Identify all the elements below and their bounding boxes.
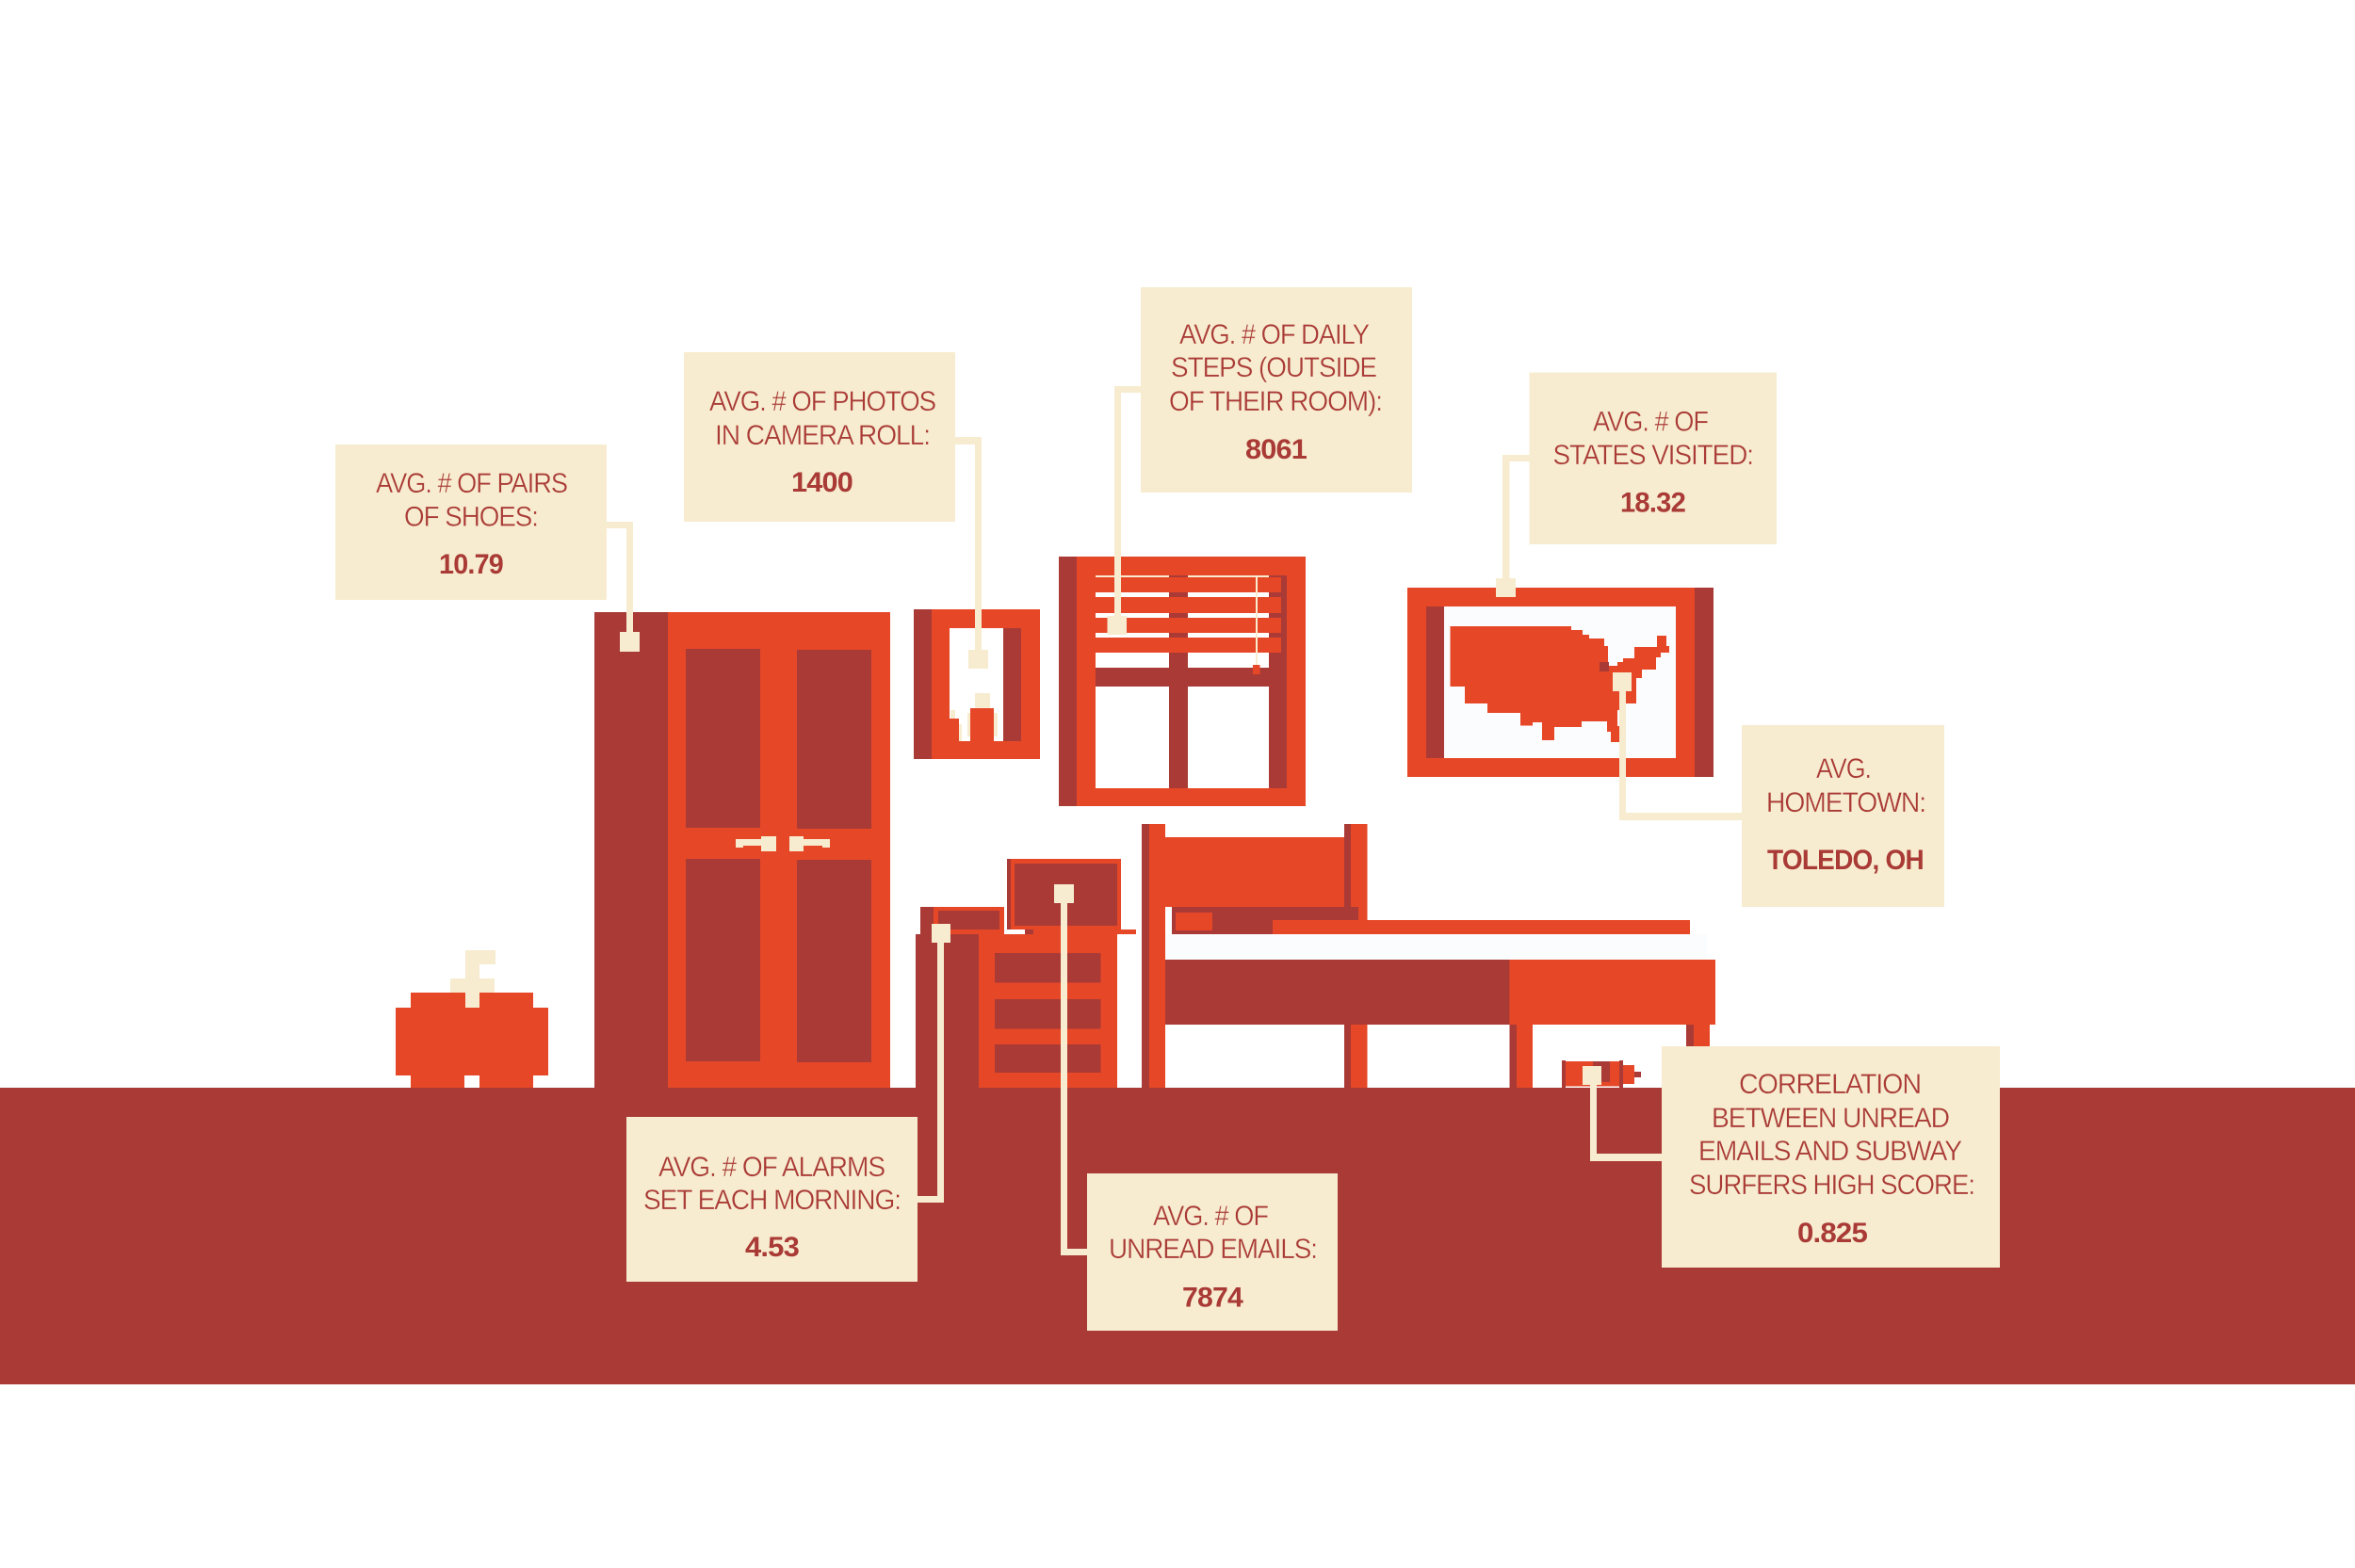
icon: alarm clock — [920, 907, 1004, 934]
icon: bed — [1142, 824, 1715, 1088]
icon: apple-shaped pouf — [396, 950, 548, 1088]
callout: states visited: STATES VISITED: — [1552, 440, 1753, 471]
callout: pairs of shoes: OF SHOES: — [404, 501, 538, 533]
icon: nightstand — [916, 934, 1117, 1088]
callout: daily steps: 8061 — [1245, 434, 1307, 465]
callout: email and subway surfers correlation: CORRELATION — [1739, 1069, 1921, 1100]
callout: unread emails: UNREAD EMAILS: — [1109, 1234, 1317, 1265]
callout: hometown: AVG. — [1816, 753, 1871, 784]
callout: daily steps: OF THEIR ROOM): — [1169, 386, 1382, 417]
icon: framed map of the United States — [1407, 588, 1713, 777]
callout: unread emails: AVG. # OF — [1153, 1201, 1268, 1232]
callout: daily steps: AVG. # OF DAILY — [1179, 319, 1370, 350]
icon: phone on the floor — [1562, 1060, 1641, 1088]
callout: daily steps: STEPS (OUTSIDE — [1171, 352, 1376, 383]
icon: framed photo — [914, 609, 1040, 759]
callout: email and subway surfers correlation: EMAILS AND SUBWAY — [1698, 1136, 1962, 1167]
callout: hometown: HOMETOWN: — [1766, 787, 1925, 818]
callout: photos in camera roll — [684, 352, 988, 669]
icon: laptop — [1007, 859, 1136, 934]
callout: email and subway surfers correlation: SURFERS HIGH SCORE: — [1689, 1170, 1974, 1201]
callout: photos in camera roll: IN CAMERA ROLL: — [715, 420, 930, 451]
callout: pairs of shoes: AVG. # OF PAIRS — [376, 468, 567, 499]
callout: unread emails: 7874 — [1182, 1283, 1243, 1313]
callout: photos in camera roll: 1400 — [791, 467, 853, 498]
callout: email and subway surfers correlation — [1583, 1046, 2000, 1268]
callout: states visited — [1496, 373, 1777, 597]
callout: alarms each morning: 4.53 — [745, 1232, 799, 1263]
callout: unread emails — [1054, 884, 1338, 1331]
callout: alarms each morning — [626, 924, 950, 1282]
callout: pairs of shoes: 10.79 — [439, 549, 503, 580]
callout: email and subway surfers correlation: 0.825 — [1797, 1218, 1867, 1249]
icon: wardrobe — [594, 612, 890, 1088]
callout: hometown — [1613, 672, 1944, 907]
callout: email and subway surfers correlation: BETWEEN UNREAD — [1712, 1103, 1949, 1134]
callout: alarms each morning: AVG. # OF ALARMS — [658, 1152, 885, 1183]
floor band — [0, 1088, 2355, 1384]
callout: states visited: AVG. # OF — [1593, 407, 1708, 437]
callout: states visited: 18.32 — [1620, 488, 1685, 518]
callout: hometown: TOLEDO, OH — [1767, 845, 1924, 876]
callout: photos in camera roll: AVG. # OF PHOTOS — [709, 386, 935, 417]
callout: daily steps — [1108, 287, 1412, 635]
icon: window with blinds — [1059, 557, 1306, 806]
callout: pairs of shoes — [335, 445, 640, 652]
callout: alarms each morning: SET EACH MORNING: — [643, 1185, 901, 1216]
